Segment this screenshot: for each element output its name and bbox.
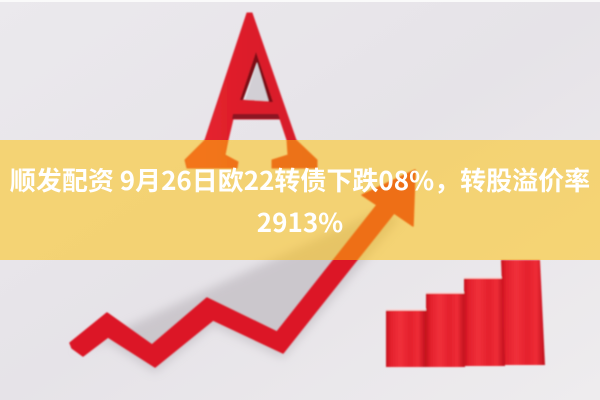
title text: 顺发配资 9月26日欧22转债下跌08%，转股溢价率 — [10, 161, 590, 198]
bar chart: red cylinders — [386, 260, 545, 367]
translucent yellow banner — [0, 140, 600, 260]
icon: rising zigzag arrow — [70, 170, 415, 372]
bar 1 — [386, 309, 426, 367]
bar 3 — [464, 277, 505, 366]
bar 2 — [426, 292, 465, 367]
title text — [10, 161, 590, 240]
bar 4 — [501, 260, 545, 365]
title text: 2913% — [257, 203, 343, 240]
icon: red letter A — [185, 13, 317, 168]
